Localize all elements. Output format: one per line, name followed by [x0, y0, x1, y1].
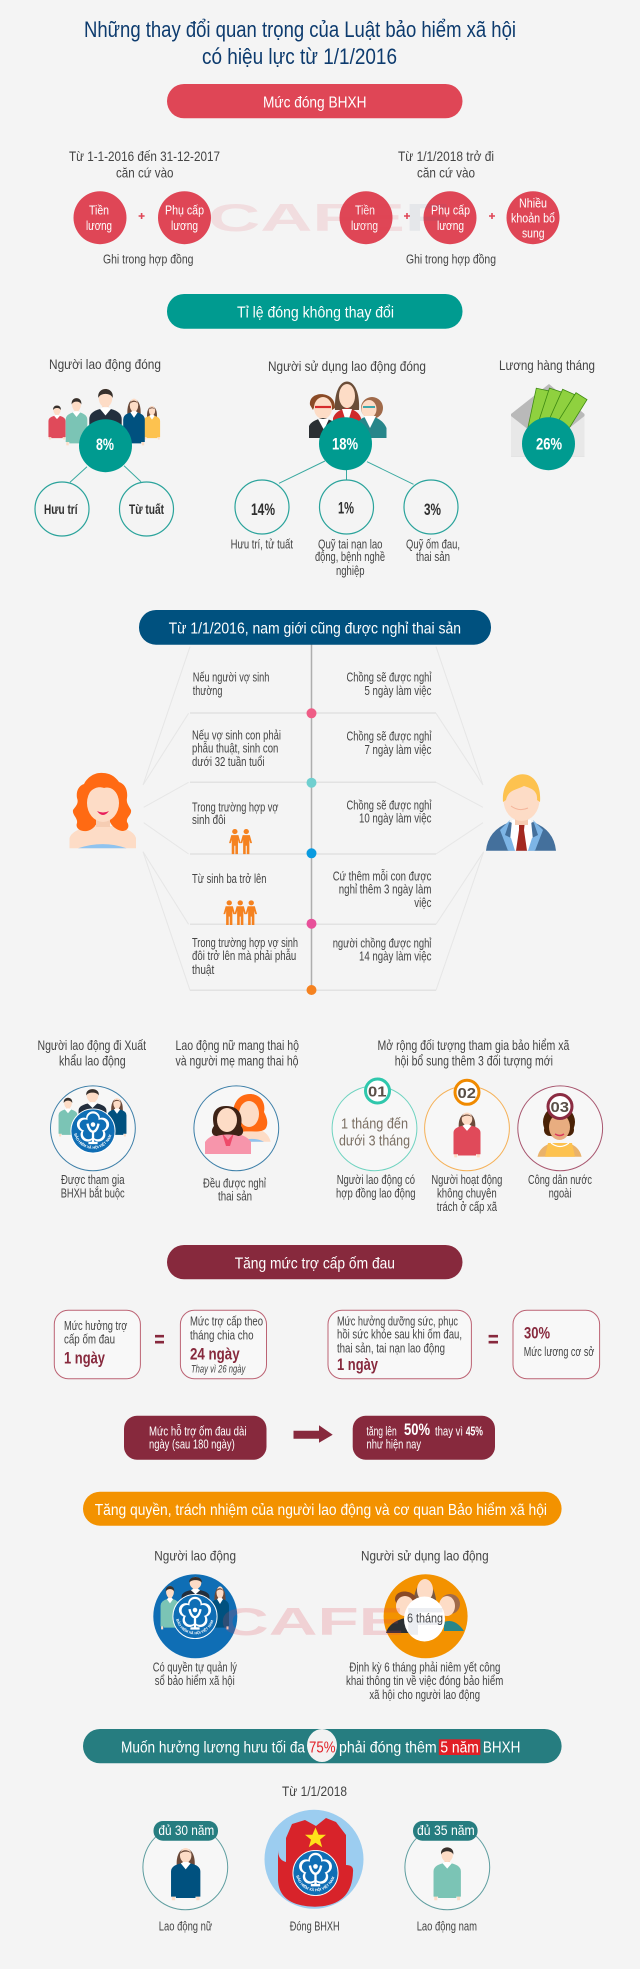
box: mức hưởng dưỡng sức — [328, 1310, 471, 1379]
text: người hoạt động: trách ở cấp xã — [437, 1200, 497, 1214]
text: người sử dụng lao động: Người sử dụng lao động — [361, 1548, 489, 1564]
circle: phụ cấp lương 2018: lương — [437, 218, 464, 233]
text: thêm 3 ngày: việc — [414, 896, 431, 910]
circle: 01 — [332, 1079, 417, 1171]
text: quỹ tai nạn: nghiệp — [336, 564, 365, 578]
text: phẫu thuật: dưới 32 tuần tuổi — [192, 755, 264, 769]
panel: nam giới nghỉ thai sản — [70, 610, 556, 995]
text: lao động nữ mang thai hộ: và người mẹ mang thai hộ — [176, 1052, 299, 1068]
text: period 2016-2017: căn cứ vào — [116, 164, 174, 180]
circle: lao động nam — [405, 1821, 490, 1910]
text: đều được nghỉ: thai sản — [218, 1189, 252, 1203]
text: mở rộng đối tượng: Mở rộng đối tượng tham gia bảo hiểm xã — [378, 1037, 570, 1053]
circle: 8%: 8% — [96, 435, 114, 454]
panel: đối tượng tham gia — [38, 1037, 603, 1214]
text: 5 ngày: Chồng sẽ được nghỉ — [346, 671, 432, 685]
heading: lương hưu 75%: phải đóng thêm — [339, 1740, 437, 1757]
box: mức hưởng trợ cấp: cấp ốm đau — [64, 1332, 115, 1346]
connector diagrams — [143, 647, 484, 990]
heading: tăng quyền: Tăng quyền, trách nhiệm của người lao động và cơ quan Bảo hiểm xã hội — [95, 1501, 547, 1519]
text: đều được nghỉ: Đều được nghỉ — [203, 1177, 266, 1191]
heading: lương hưu 75%: Muốn hưởng lương hưu tối đa — [121, 1740, 305, 1757]
heading: tăng mức trợ cấp — [167, 1245, 462, 1279]
box: tăng lên 50%: như hiện nay — [366, 1438, 422, 1452]
circle: 1% — [320, 480, 374, 534]
text: mở rộng đối tượng — [378, 1037, 570, 1068]
watermark: CAFE F — [220, 1601, 445, 1644]
circle: 26%: 26% — [536, 435, 562, 454]
box: tăng lên 50%: 50% — [404, 1420, 430, 1439]
text: lương hàng tháng: Lương hàng tháng — [499, 357, 595, 373]
panel: tỉ lệ đóng không thay đổi — [35, 294, 595, 578]
box: hỗ trợ ốm đau dài ngày: Mức hỗ trợ ốm đau dài — [149, 1423, 246, 1438]
icon: employers group — [309, 382, 386, 440]
circle: 3% — [404, 480, 458, 534]
text: period from 2018 — [398, 148, 494, 180]
text: sinh đôi phẫu thuật: đôi trở lên mà phải phẫu — [192, 948, 296, 963]
heading: mức đóng BHXH — [167, 84, 462, 118]
timeline — [306, 644, 316, 995]
box: mức trợ cấp theo tháng: 24 ngày — [190, 1344, 240, 1363]
box: mức trợ cấp theo tháng: tháng chia cho — [190, 1328, 254, 1342]
arrow — [294, 1425, 333, 1443]
text: hưu trí, tử tuất: Hưu trí, tử tuất — [231, 537, 293, 551]
panel: tăng mức trợ cấp ốm đau — [54, 1245, 600, 1460]
box: 30% mức lương cơ sở — [513, 1310, 600, 1379]
text: định kỳ 6 tháng: khai thông tin về việc đóng bảo hiểm — [346, 1674, 503, 1688]
box: tăng lên 50%: thay vì — [435, 1424, 463, 1438]
box: mức hưởng trợ cấp: 1 ngày — [64, 1348, 105, 1367]
text: định kỳ 6 tháng — [346, 1661, 503, 1702]
text: người hoạt động: Người hoạt động — [431, 1173, 502, 1187]
heading: tỉ lệ đóng: Tỉ lệ đóng không thay đổi — [237, 303, 394, 321]
text: 10 ngày: Chồng sẽ được nghỉ — [346, 798, 432, 812]
circle: nhiều khoản bổ sung — [506, 191, 560, 244]
text: người lao động: Người lao động — [154, 1548, 236, 1564]
circle: tử tuất — [120, 482, 174, 536]
panel: tăng quyền trách nhiệm — [83, 1492, 562, 1702]
circle: 02: 02 — [458, 1085, 476, 1102]
text: công dân nước ngoài — [528, 1173, 592, 1200]
text: 7 ngày: Chồng sẽ được nghỉ — [346, 730, 432, 744]
text: được tham gia — [61, 1173, 125, 1200]
text: thêm 3 ngày: nghỉ thêm 3 ngày làm — [339, 883, 431, 897]
circle: employers, 6 tháng — [384, 1574, 468, 1658]
text: lao động nữ mang thai hộ — [176, 1037, 299, 1068]
icon: equals — [155, 1336, 164, 1342]
text: sinh thường — [193, 671, 269, 698]
title: có hiệu lực từ 1/1/2016 — [202, 44, 397, 69]
text: người hoạt động: không chuyên — [437, 1186, 497, 1200]
box: mức hưởng trợ cấp: Mức hưởng trợ — [64, 1319, 127, 1333]
circle: 18%: 18% — [332, 435, 358, 454]
heading: lương hưu 75%: BHXH — [483, 1740, 520, 1757]
text: 5 ngày: 5 ngày làm việc — [364, 684, 431, 698]
text: mở rộng đối tượng: hội bổ sung thêm 3 đối tượng mới — [395, 1052, 553, 1068]
text: sinh ba: Từ sinh ba trở lên — [192, 872, 267, 886]
circle: 1%: 1% — [338, 498, 354, 517]
circle: 18% — [319, 417, 372, 470]
box: tăng lên 50% — [353, 1416, 495, 1460]
icon: plus — [404, 213, 410, 219]
text: xuất khẩu lao động — [38, 1037, 146, 1068]
circle: 14%: 14% — [251, 500, 275, 519]
text: xuất khẩu lao động: Người lao động đi Xuất — [38, 1037, 146, 1053]
heading: lương hưu 75%: 75% — [309, 1740, 336, 1757]
text: quyền tự quản lý — [153, 1661, 238, 1688]
text: phẫu thuật — [192, 728, 281, 769]
icon: workers group — [48, 389, 160, 455]
box: mức trợ cấp theo tháng: Thay vì 26 ngày — [191, 1363, 246, 1375]
text: ghi trong hợp đồng right: Ghi trong hợp đồng — [406, 251, 496, 266]
icon: triplets — [223, 900, 257, 925]
circle: workers with logo — [50, 1086, 135, 1171]
text: định kỳ 6 tháng: xã hội cho người lao động — [369, 1688, 480, 1702]
connector lines — [70, 466, 141, 482]
text: thêm 3 ngày — [333, 868, 431, 910]
panel: lương hưu tối đa — [83, 1729, 562, 1934]
text: sinh thường: Nếu người vợ sinh — [193, 671, 269, 685]
box: mức hưởng trợ cấp — [54, 1310, 140, 1379]
heading: lương hưu 75% — [83, 1729, 562, 1763]
box: mức trợ cấp theo tháng — [180, 1310, 266, 1379]
text: người lao động đóng: Người lao động đóng — [49, 356, 161, 372]
circle: nhiều khoản bổ sung: khoản bổ — [511, 211, 555, 226]
text: lao động nữ mang thai hộ: Lao động nữ mang thai hộ — [176, 1037, 299, 1053]
circle: nhiều khoản bổ sung: Nhiều — [519, 195, 547, 210]
text: phẫu thuật: Nếu vợ sinh con phải — [192, 728, 281, 742]
icon: BHXH shield — [264, 1810, 364, 1909]
circle: tiền lương: lương — [86, 218, 112, 233]
box: tăng lên 50%: 45% — [466, 1424, 483, 1438]
circle: two women — [194, 1086, 279, 1171]
circle: nhiều khoản bổ sung: sung — [522, 226, 544, 241]
text: quỹ ốm đau: thai sản — [416, 550, 450, 564]
circle: employers, 6 tháng: 6 tháng — [407, 1610, 443, 1625]
connector lines — [279, 461, 414, 484]
text: lao động nữ: Lao động nữ — [159, 1919, 212, 1934]
box: mức hưởng dưỡng sức: 1 ngày — [337, 1355, 378, 1374]
text: người hoạt động — [431, 1173, 502, 1214]
text: được tham gia: Được tham gia — [61, 1173, 125, 1187]
text: period from 2018: căn cứ vào — [417, 164, 475, 180]
text: ghi trong hợp đồng left: Ghi trong hợp đồng — [103, 251, 194, 266]
circle: tử tuất: Từ tuất — [129, 501, 164, 517]
text: phẫu thuật: phẫu thuật, sinh con — [192, 741, 278, 756]
text: 14 ngày — [333, 937, 432, 964]
text: quỹ tai nạn — [315, 537, 385, 578]
text: người sử dụng lao động đóng: Người sử dụng lao động đóng — [268, 358, 426, 374]
text: quyền tự quản lý: Có quyền tự quản lý — [153, 1661, 238, 1675]
box: hỗ trợ ốm đau dài ngày — [124, 1416, 266, 1460]
circle: 01: 01 — [368, 1084, 386, 1100]
circle: 14% — [235, 480, 289, 534]
text: sinh đôi: Trong trường hợp vợ — [192, 800, 278, 814]
circle: phụ cấp lương: Phụ cấp — [165, 202, 204, 217]
text: đóng BHXH: Đóng BHXH — [290, 1919, 340, 1934]
heading: mức đóng BHXH: Mức đóng BHXH — [263, 94, 366, 111]
text: lao động nam: Lao động nam — [417, 1919, 477, 1934]
text: thêm 3 ngày: Cứ thêm mỗi con được — [333, 868, 431, 883]
text: period 2016-2017 — [69, 148, 220, 180]
text: quỹ tai nạn: Quỹ tai nạn lao — [318, 537, 383, 551]
text: sinh thường: thường — [193, 684, 222, 698]
text: sinh đôi — [192, 800, 278, 827]
circle: 8% — [79, 419, 132, 472]
text: 10 ngày — [346, 798, 432, 825]
circle: 01: dưới 3 tháng — [339, 1132, 410, 1149]
circle: 03 — [518, 1086, 603, 1171]
heading: tăng mức trợ cấp: Tăng mức trợ cấp ốm đau — [235, 1255, 395, 1272]
heading: nam giới nghỉ thai sản — [139, 610, 491, 645]
text: 14 ngày: người chồng được nghỉ — [333, 937, 432, 951]
title: Những thay đổi quan trọng của Luật bảo hiểm xã hội — [84, 17, 516, 42]
circle: 26% — [522, 417, 575, 470]
text: sinh đôi: sinh đôi — [192, 813, 226, 827]
circle: hưu trí — [35, 482, 89, 536]
text: 7 ngày — [346, 730, 432, 757]
box: tăng lên 50%: tăng lên — [366, 1424, 397, 1438]
circle: tiền lương 2018: lương — [351, 218, 378, 233]
text: quỹ ốm đau — [406, 537, 460, 564]
circle: phụ cấp lương 2018: Phụ cấp — [431, 202, 470, 217]
text: được tham gia: BHXH bắt buộc — [61, 1185, 125, 1200]
icon: equals — [489, 1336, 498, 1342]
text: quỹ ốm đau: Quỹ ốm đau, — [406, 537, 460, 551]
text: quỹ tai nạn: động, bệnh nghề — [315, 550, 385, 564]
circle: lao động nam: đủ 35 năm — [417, 1822, 475, 1838]
icon: plus — [139, 213, 145, 219]
text: 14 ngày: 14 ngày làm việc — [359, 950, 431, 964]
text: người lao động có hợp đồng: hợp đồng lao động — [336, 1186, 416, 1200]
heading: tăng quyền — [83, 1492, 562, 1526]
box: mức hưởng dưỡng sức: thai sản, tai nạn lao động — [337, 1341, 445, 1355]
text: sinh đôi phẫu thuật: Trong trường hợp vợ sinh — [192, 936, 298, 950]
heading: nam giới nghỉ thai sản: Từ 1/1/2016, nam giới cũng được nghỉ thai sản — [169, 621, 461, 638]
circle: lao động nữ — [143, 1821, 228, 1910]
panel: mức đóng BHXH — [69, 84, 560, 266]
circle: 03: 03 — [550, 1099, 569, 1116]
text: xuất khẩu lao động: khẩu lao động — [59, 1052, 126, 1068]
heading: lương hưu 75%: 5 năm — [440, 1740, 479, 1757]
circle: tiền lương 2018: Tiền — [355, 202, 375, 217]
circle: tiền lương: Tiền — [89, 202, 109, 217]
text: 10 ngày: 10 ngày làm việc — [359, 811, 431, 825]
icon: husband — [486, 774, 556, 851]
text: 7 ngày: 7 ngày làm việc — [364, 743, 431, 757]
circle: phụ cấp lương: lương — [171, 218, 198, 233]
box: 30% mức lương cơ sở: Mức lương cơ sở — [524, 1345, 594, 1359]
text: quyền tự quản lý: sổ bảo hiểm xã hội — [155, 1674, 235, 1688]
circle: workers with logo — [153, 1574, 237, 1658]
icon: twins — [229, 829, 252, 854]
circle: tiền lương 2018 — [340, 191, 392, 244]
icon: envelope with money — [511, 384, 587, 457]
box: mức hưởng dưỡng sức: hồi sức khỏe sau khi ốm đau, — [337, 1328, 462, 1342]
text: 5 ngày — [346, 671, 432, 698]
heading: tỉ lệ đóng — [167, 294, 462, 329]
circle: 01: 1 tháng đến — [341, 1115, 408, 1132]
circle: phụ cấp lương 2018 — [424, 191, 476, 244]
text: người lao động có hợp đồng: Người lao động có — [337, 1173, 415, 1187]
circle: 3%: 3% — [424, 500, 441, 519]
text: công dân nước ngoài: ngoài — [549, 1186, 571, 1200]
circle: phụ cấp lương — [158, 191, 211, 244]
circle: lao động nữ: đủ 30 năm — [158, 1822, 214, 1838]
text: công dân nước ngoài: Công dân nước — [528, 1173, 592, 1187]
box: 30% mức lương cơ sở: 30% — [524, 1323, 550, 1342]
watermark: CAFE F — [208, 197, 449, 240]
circle: 02 — [425, 1080, 509, 1171]
title — [84, 17, 516, 69]
text: người lao động có hợp đồng — [336, 1173, 416, 1200]
circle: hưu trí: Hưu trí — [44, 501, 78, 517]
text: từ 1/1/2018: Từ 1/1/2018 — [282, 1783, 347, 1799]
icon: plus — [489, 213, 495, 219]
box: mức trợ cấp theo tháng: Mức trợ cấp theo — [190, 1315, 263, 1329]
box: mức hưởng dưỡng sức: Mức hưởng dưỡng sức, phục — [337, 1314, 458, 1328]
text: đều được nghỉ — [203, 1177, 266, 1203]
circle: tiền lương — [74, 191, 126, 244]
text: period from 2018: Từ 1/1/2018 trở đi — [398, 148, 494, 164]
text: định kỳ 6 tháng: Định kỳ 6 tháng phải niêm yết công — [349, 1661, 500, 1675]
text: sinh đôi phẫu thuật — [192, 936, 298, 977]
text: period 2016-2017: Từ 1-1-2016 đến 31-12-2017 — [69, 148, 220, 164]
box: hỗ trợ ốm đau dài ngày: ngày (sau 180 ngày) — [149, 1438, 235, 1452]
text: sinh đôi phẫu thuật: thuật — [192, 963, 215, 977]
icon: wife — [70, 773, 136, 848]
